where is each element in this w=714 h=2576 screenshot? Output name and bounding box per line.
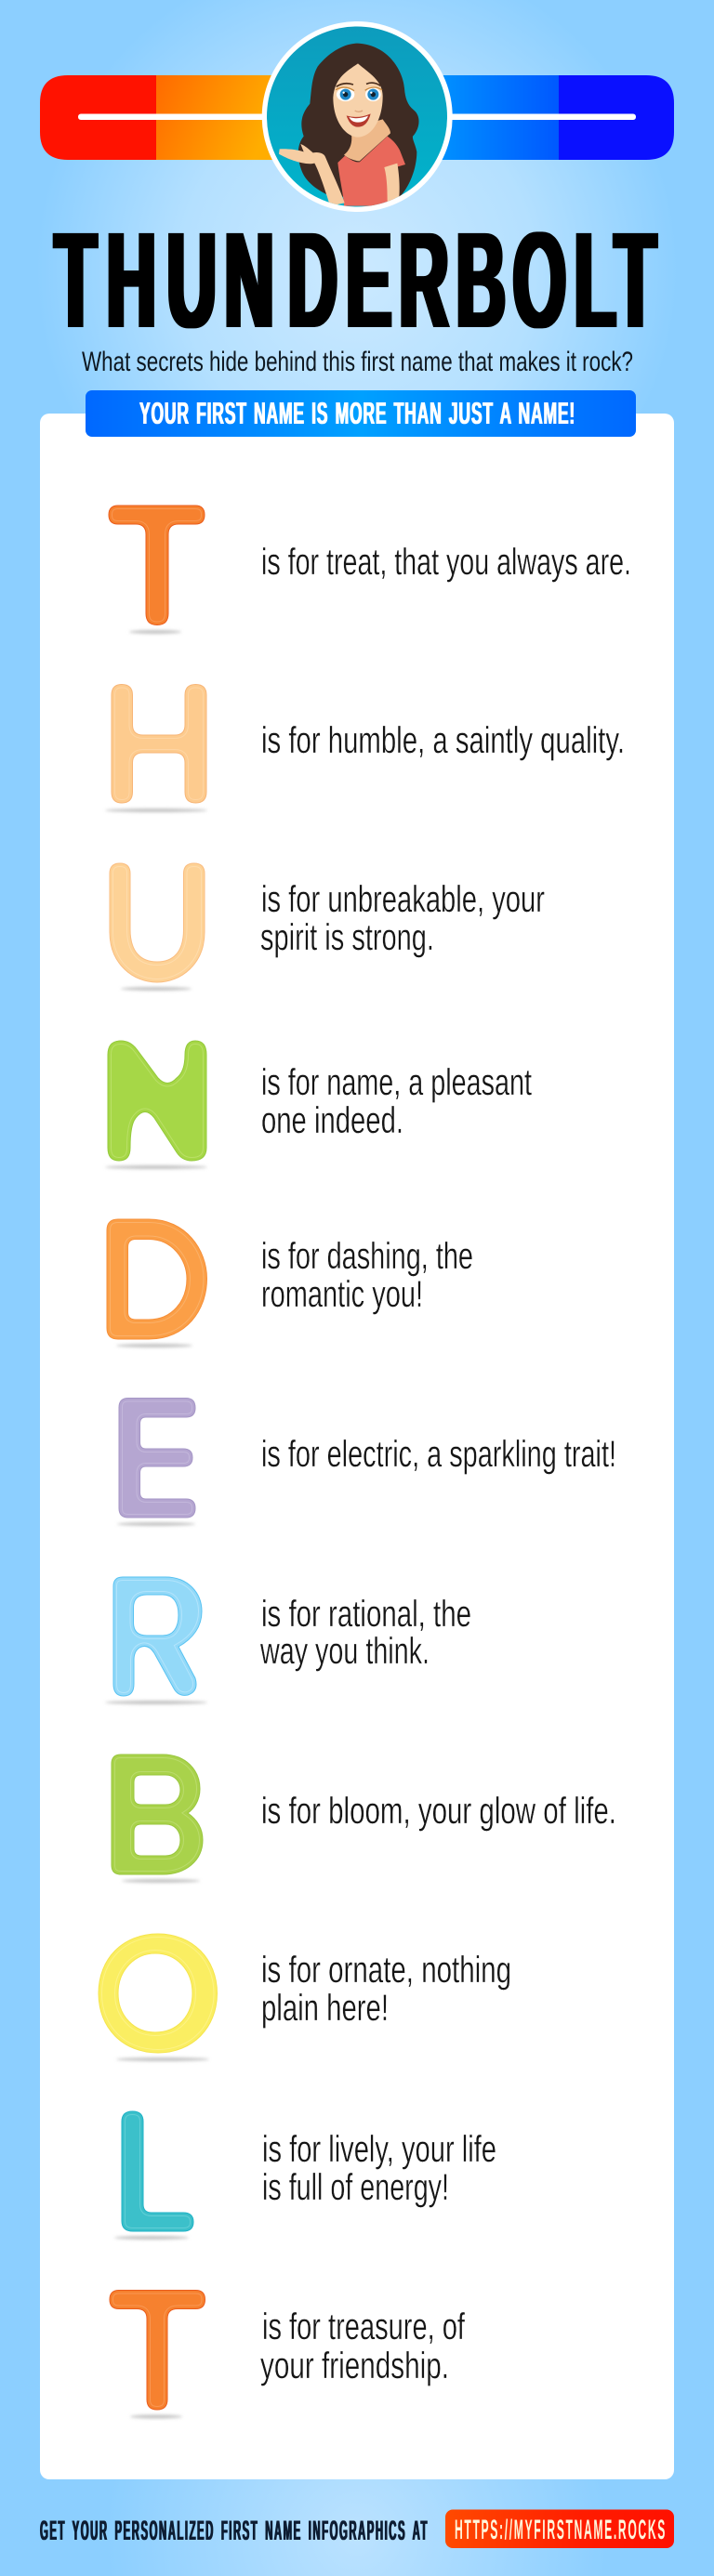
- row: B for bloom: [112, 1755, 616, 1883]
- row: T for treasure: [110, 2290, 466, 2418]
- text: treasure: [260, 2307, 466, 2386]
- face: [333, 63, 383, 138]
- text: name: is for name, a pleasant: [261, 1062, 532, 1103]
- text: dashing: is for dashing, the: [261, 1236, 473, 1277]
- icon: letter D: [107, 1219, 206, 1347]
- text: unbreakable: is for unbreakable, your: [261, 879, 545, 920]
- row: L for lively: [114, 2111, 496, 2240]
- text: ornate: is for ornate, nothing: [261, 1950, 511, 1991]
- text: rational: [259, 1594, 471, 1672]
- icon: letter B: [112, 1755, 203, 1883]
- header ribbon bar: [40, 75, 674, 160]
- title: THUNDERBOLT: [55, 204, 656, 357]
- row: T for treat: [109, 506, 631, 634]
- avatar: woman in circle: [262, 21, 453, 212]
- footer: [40, 2509, 674, 2548]
- text: name: [261, 1062, 532, 1141]
- icon: letter L: [114, 2111, 193, 2240]
- arm and hand: [279, 144, 345, 206]
- icon: letter U: [110, 863, 205, 991]
- icon: letter N: [105, 1041, 207, 1169]
- row: O for ornate: [99, 1934, 511, 2061]
- right arm: [384, 164, 400, 204]
- text: lively: is for lively, your life: [262, 2129, 496, 2170]
- text: lively: [262, 2129, 496, 2208]
- row: E for electric: [117, 1398, 616, 1526]
- text: dashing: romantic you!: [261, 1274, 423, 1315]
- icon: letter E: [117, 1398, 195, 1526]
- text: ornate: plain here!: [261, 1988, 389, 2029]
- neck and chest: [344, 119, 390, 161]
- text: unbreakable: [260, 879, 545, 958]
- text: ornate: [261, 1950, 511, 2029]
- row: N for name: [105, 1041, 532, 1169]
- icon: letter H: [105, 684, 207, 812]
- icon: letter T: [109, 506, 205, 634]
- row: H for humble: [105, 684, 625, 812]
- text: treasure: is for treasure, of: [262, 2307, 466, 2347]
- banner: [86, 390, 636, 437]
- text: rational: is for rational, the: [261, 1594, 471, 1635]
- shirt: [337, 137, 405, 206]
- icon: letter T: [110, 2290, 205, 2418]
- row: D for dashing: [107, 1219, 473, 1347]
- row: U for unbreakable: [110, 863, 545, 991]
- icon: letter R: [105, 1577, 207, 1704]
- smile: [347, 111, 371, 127]
- text: treasure: your friendship.: [260, 2346, 449, 2386]
- footer url button: [445, 2509, 674, 2548]
- text: lively: is full of energy!: [262, 2167, 449, 2208]
- row: R for rational: [105, 1577, 471, 1704]
- text: dashing: [261, 1236, 473, 1315]
- icon: letter O: [99, 1934, 218, 2061]
- text: unbreakable: spirit is strong.: [260, 917, 434, 958]
- panel: letters: [40, 414, 674, 2479]
- text: name: one indeed.: [261, 1100, 403, 1141]
- text: rational: way you think.: [259, 1631, 430, 1672]
- eyes: [336, 83, 382, 101]
- hair: [298, 44, 419, 197]
- panel background: [40, 414, 674, 2479]
